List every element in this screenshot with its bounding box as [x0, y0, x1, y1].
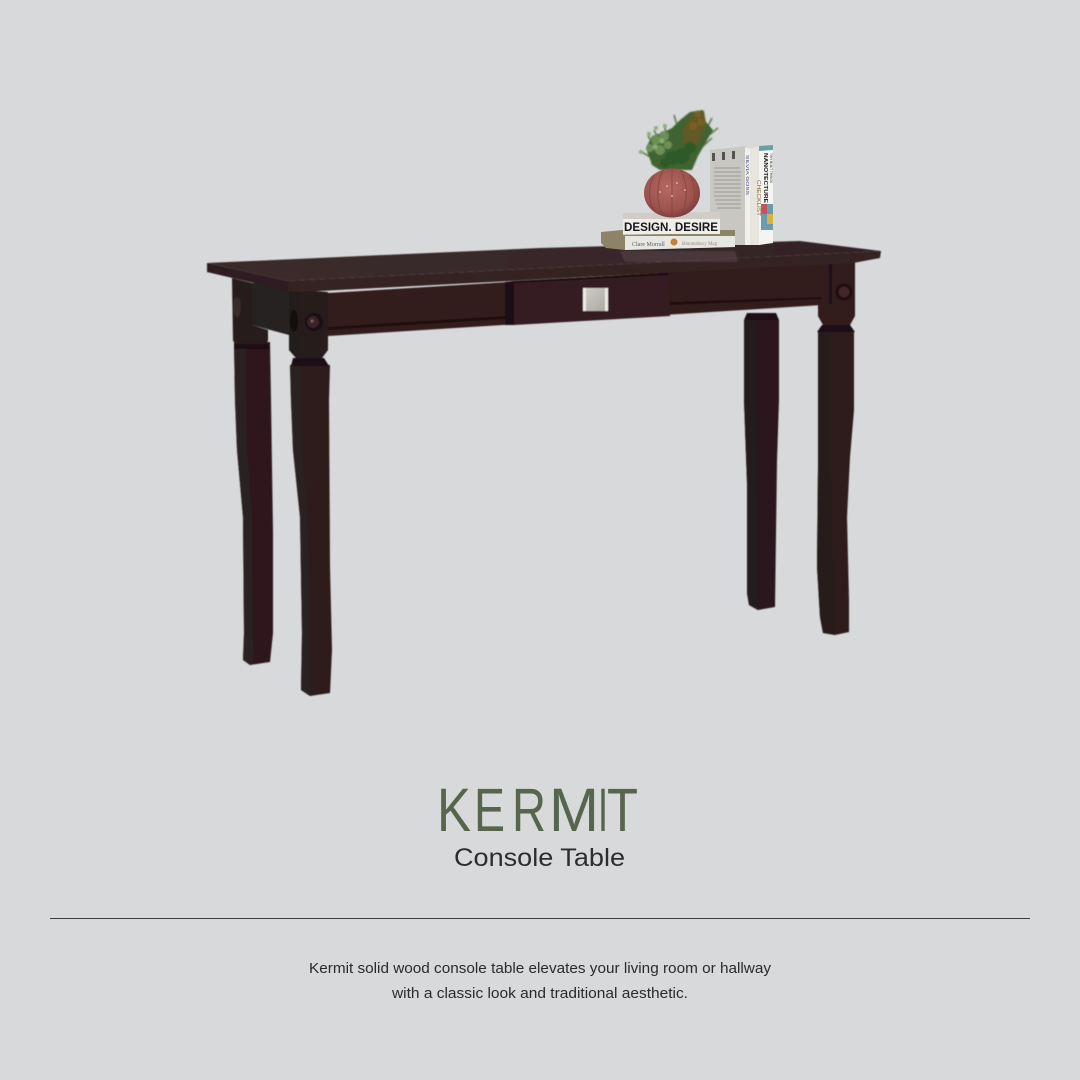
drawer	[505, 273, 670, 325]
standing books: NANOTECTURE	[762, 153, 768, 203]
back left leg	[232, 278, 273, 665]
drawer handle	[583, 288, 608, 311]
description	[309, 960, 772, 1002]
back right leg	[744, 313, 779, 610]
vase	[644, 168, 700, 218]
standing books: CHECKLIST	[755, 180, 761, 216]
front apron	[328, 263, 822, 336]
console table	[207, 241, 881, 696]
front right leg	[817, 262, 855, 635]
divider rule	[50, 918, 1030, 919]
right knob	[836, 284, 852, 300]
front leg knob	[305, 313, 323, 331]
standing books: TINY BUILT THINGS	[769, 153, 774, 183]
title: KERMIT: E	[474, 776, 505, 844]
potted plant	[639, 110, 718, 218]
upper book: DESIGN. DESIRE	[624, 222, 718, 234]
title: KERMIT: R	[512, 776, 546, 844]
tabletop	[207, 241, 881, 292]
side knob	[290, 310, 298, 332]
title: KERMIT	[437, 776, 638, 844]
foliage	[639, 110, 718, 170]
subtitle: Console Table: Console Table	[454, 844, 625, 872]
title: KERMIT: T	[607, 776, 638, 844]
title: KERMIT: K	[437, 776, 471, 844]
title: KERMIT: M	[549, 776, 599, 844]
lower book: Bloomsbury Mag	[682, 242, 718, 247]
apron lower moulding	[328, 297, 822, 330]
standing books	[710, 145, 774, 245]
title: KERMIT: I	[598, 776, 608, 844]
decor on table	[601, 110, 774, 250]
stacked books	[601, 212, 735, 250]
description line 1: Kermit solid wood console table elevates your living room or hallway	[309, 960, 772, 977]
front left leg	[289, 285, 332, 696]
lower book: Clare Morrall	[632, 242, 665, 248]
left apron side	[252, 283, 289, 335]
description line 2: with a classic look and traditional aesthetic.	[391, 985, 688, 1002]
standing books: SILVIA GOSS	[745, 155, 750, 195]
lower book	[601, 230, 735, 250]
